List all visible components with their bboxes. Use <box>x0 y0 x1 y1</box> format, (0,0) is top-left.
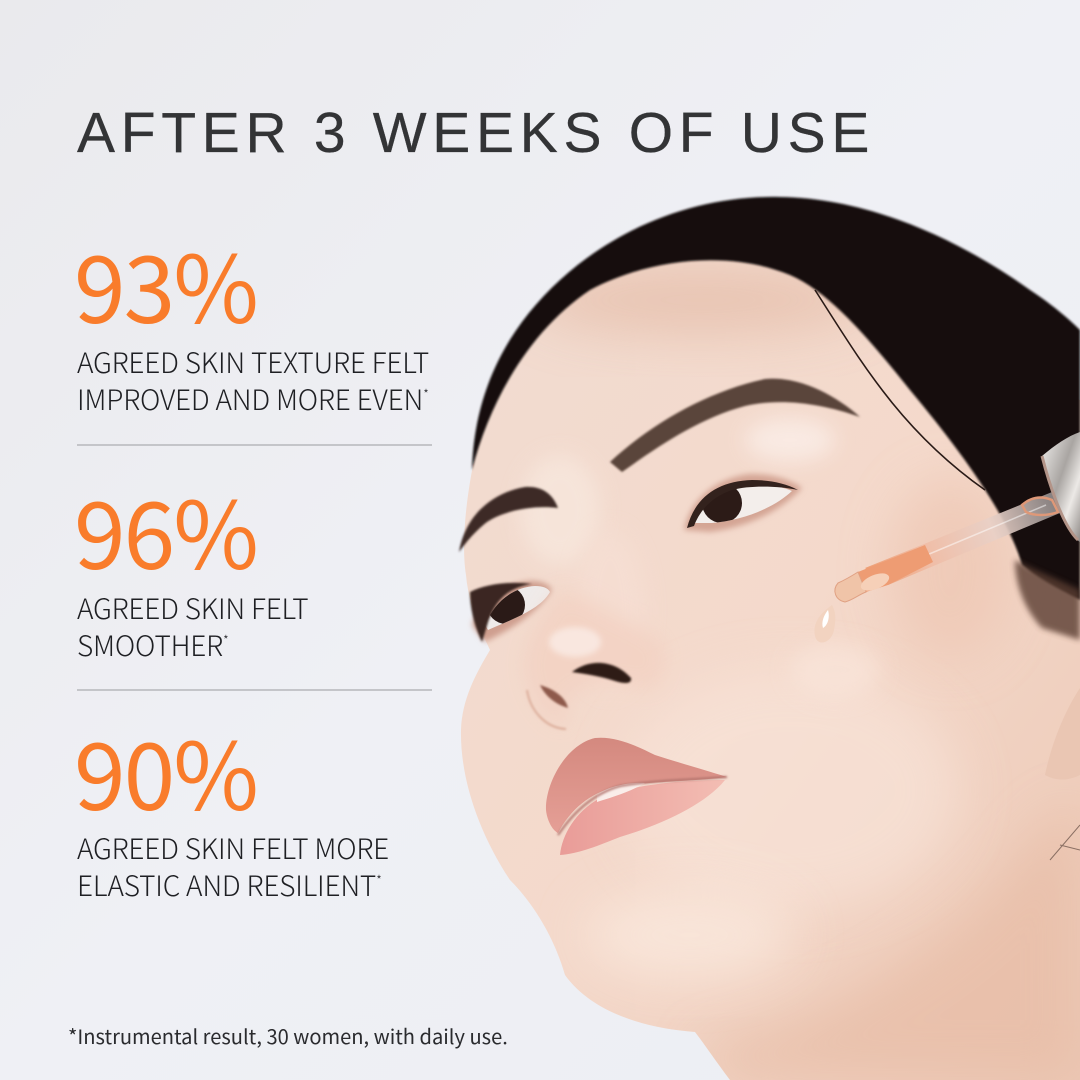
eye: right <box>684 474 802 532</box>
eyebrow: right <box>610 379 860 472</box>
eyebrow: left <box>459 487 558 552</box>
hair <box>472 197 1080 640</box>
stat: 96 percent: 96% <box>74 461 257 596</box>
stat: 90 percent: 90% <box>74 702 257 837</box>
neck and skin <box>461 238 1080 1080</box>
title: AFTER 3 WEEKS OF USE <box>77 101 875 165</box>
photo: woman's face with serum dropper <box>458 195 1080 1080</box>
nose <box>524 590 665 729</box>
description: skin texture: IMPROVED AND MORE EVEN* <box>77 378 429 418</box>
description: elastic: ELASTIC AND RESILIENT* <box>77 864 382 904</box>
description: smoother: SMOOTHER* <box>77 624 229 664</box>
serum drip <box>814 605 835 643</box>
hair strand at neck <box>1050 825 1080 860</box>
dropper <box>835 432 1080 602</box>
description: smoother <box>77 588 308 664</box>
cheek gloss <box>790 642 880 698</box>
description: elastic <box>77 828 389 904</box>
description: skin texture: AGREED SKIN TEXTURE FELT <box>77 342 429 382</box>
footnote: *Instrumental result, 30 women, with daily use. <box>68 1021 508 1050</box>
description: smoother: AGREED SKIN FELT <box>77 588 308 628</box>
stat: 93 percent: 93% <box>74 215 257 350</box>
description: skin texture <box>77 342 429 418</box>
ear <box>1045 688 1080 780</box>
description: elastic: AGREED SKIN FELT MORE <box>77 828 389 868</box>
shading: jaw, neck and temple <box>520 265 1080 1080</box>
eye: left <box>470 581 552 642</box>
lips <box>546 738 727 855</box>
